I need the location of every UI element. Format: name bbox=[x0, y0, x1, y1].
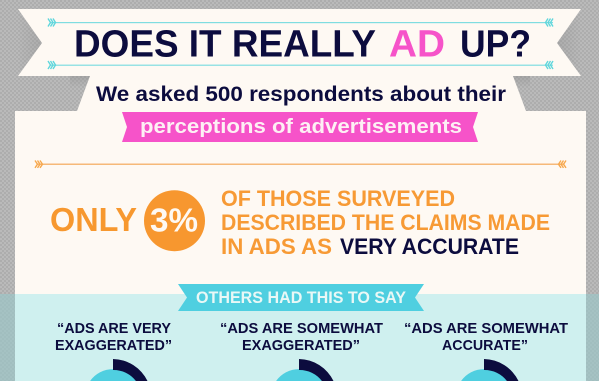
quote label bbox=[56, 323, 171, 350]
donut chart bbox=[276, 359, 334, 381]
quote label: EXAGGERATED” bbox=[242, 337, 360, 354]
statistic description: IN ADS AS bbox=[221, 234, 332, 259]
pink ribbon: perceptions of advertisements bbox=[140, 116, 462, 138]
statistic description: OF THOSE SURVEYED bbox=[221, 186, 455, 211]
title: UP? bbox=[460, 24, 531, 66]
statistic: only 3%: ONLY bbox=[50, 201, 137, 238]
column: somewhat accurate bbox=[404, 320, 568, 381]
statistic description bbox=[221, 186, 550, 259]
icon: arrow fletching bottom left bbox=[48, 61, 56, 69]
quote label: “ADS ARE VERY bbox=[57, 320, 171, 337]
donut chart bbox=[90, 359, 148, 381]
statistic description: VERY ACCURATE bbox=[340, 234, 519, 259]
quote label: ACCURATE” bbox=[442, 337, 528, 354]
quote label: EXAGGERATED” bbox=[55, 337, 172, 354]
subtitle: We asked 500 respondents about their bbox=[96, 83, 506, 106]
teal ribbon heading bbox=[178, 284, 424, 311]
panel: teal survey section bbox=[0, 294, 599, 381]
quote label: “ADS ARE SOMEWHAT bbox=[404, 320, 568, 337]
icon: arrow fletching top left bbox=[48, 18, 56, 26]
title: DOES IT REALLY bbox=[74, 24, 376, 66]
icon: arrow fletching top right bbox=[546, 18, 553, 26]
quote label: “ADS ARE SOMEWHAT bbox=[220, 320, 383, 337]
column: very exaggerated bbox=[55, 320, 172, 381]
statistic description: DESCRIBED THE CLAIMS MADE bbox=[221, 210, 550, 235]
orange arrow divider bbox=[35, 160, 566, 168]
donut chart bbox=[461, 359, 518, 381]
percent badge bbox=[144, 190, 205, 251]
teal ribbon heading: OTHERS HAD THIS TO SAY bbox=[196, 289, 406, 307]
icon: arrow fletching bottom right bbox=[546, 61, 553, 69]
panel: main cream panel bbox=[15, 76, 586, 294]
column: somewhat exaggerated bbox=[220, 320, 383, 381]
title banner bbox=[18, 9, 581, 76]
pink ribbon bbox=[122, 112, 478, 142]
title bbox=[74, 24, 531, 66]
quote label bbox=[405, 323, 568, 350]
percent badge: 3% bbox=[150, 202, 198, 238]
statistic: only 3% bbox=[50, 186, 550, 259]
quote label bbox=[221, 323, 383, 350]
title: AD bbox=[389, 24, 445, 66]
